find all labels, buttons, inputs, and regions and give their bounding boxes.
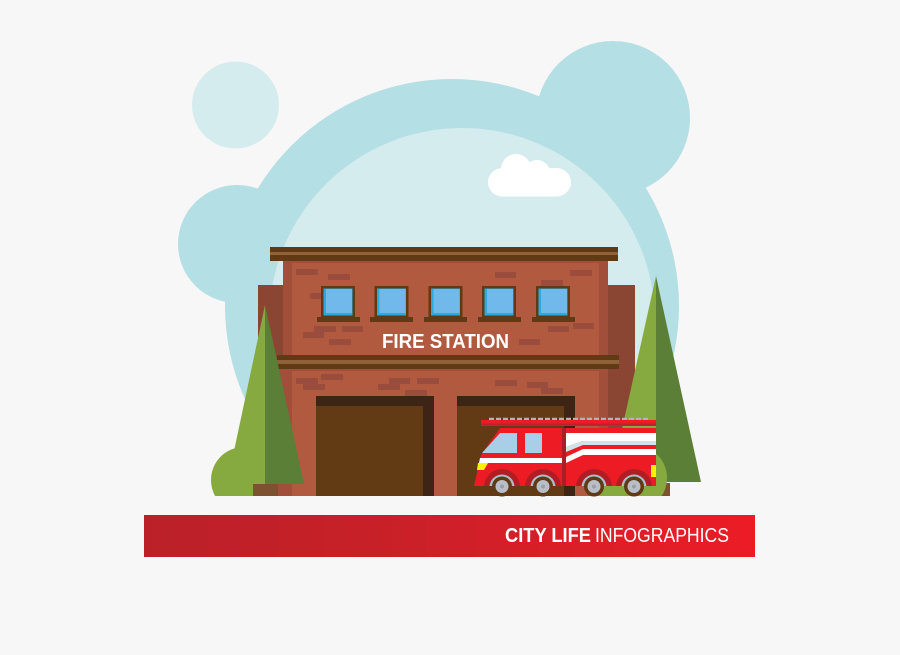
window 2 bbox=[370, 286, 413, 322]
bricks bbox=[296, 269, 594, 396]
sky circles backdrop bbox=[178, 41, 690, 399]
cab window front bbox=[482, 433, 517, 453]
foliage dark bbox=[265, 305, 304, 484]
circle: pale top left bbox=[192, 62, 279, 148]
upper floor wall bbox=[283, 260, 608, 356]
window 3 bbox=[424, 286, 467, 322]
cab bbox=[474, 428, 562, 486]
tree: right bbox=[597, 276, 701, 508]
trunk bbox=[253, 484, 277, 496]
fire truck bbox=[474, 419, 656, 505]
wheel 3 bbox=[584, 476, 604, 496]
circle: large ring bbox=[225, 79, 679, 399]
garage door right bbox=[457, 396, 575, 496]
wheel 1 bbox=[492, 476, 512, 496]
banner bbox=[144, 515, 755, 557]
wheel arches bbox=[484, 469, 652, 486]
window 1 bbox=[317, 286, 360, 322]
cab window side bbox=[525, 433, 542, 453]
left wing bbox=[258, 285, 288, 496]
bush bbox=[598, 454, 667, 496]
headlight bbox=[477, 463, 488, 470]
right wing bbox=[600, 285, 635, 496]
foliage dark bbox=[656, 276, 701, 482]
cab stripe bbox=[479, 458, 562, 463]
foliage light bbox=[227, 305, 265, 484]
sign: fire station: FIRE STATION bbox=[382, 331, 509, 353]
foliage light bbox=[610, 276, 656, 483]
building bbox=[258, 247, 635, 496]
lower floor wall bbox=[278, 368, 608, 496]
circle: top right bbox=[536, 41, 690, 195]
window 4 bbox=[478, 286, 521, 322]
middle ledge bbox=[277, 355, 619, 369]
wheel 4 bbox=[624, 476, 644, 496]
ladder bbox=[489, 418, 650, 420]
bush bbox=[211, 448, 253, 496]
tree: left bbox=[211, 305, 304, 513]
banner title bold: CITY LIFE bbox=[505, 525, 591, 547]
trunk bbox=[655, 483, 670, 496]
garage door left bbox=[316, 396, 434, 496]
pale stripe shade bbox=[566, 441, 656, 452]
window 5 bbox=[532, 286, 575, 322]
upper white stripe bbox=[566, 433, 656, 447]
window row bbox=[317, 286, 575, 322]
wheel 2 bbox=[533, 476, 553, 496]
tail light bbox=[651, 465, 656, 477]
rear body bbox=[566, 428, 656, 486]
icon: cloud bbox=[488, 154, 571, 196]
connector bbox=[562, 428, 566, 486]
circle: left bbox=[178, 185, 258, 302]
lower white stripe bbox=[566, 449, 656, 463]
roof bbox=[270, 247, 618, 261]
roof rail bbox=[481, 420, 656, 426]
banner title regular: INFOGRAPHICS bbox=[595, 525, 729, 547]
circle: large inner bbox=[272, 128, 652, 370]
